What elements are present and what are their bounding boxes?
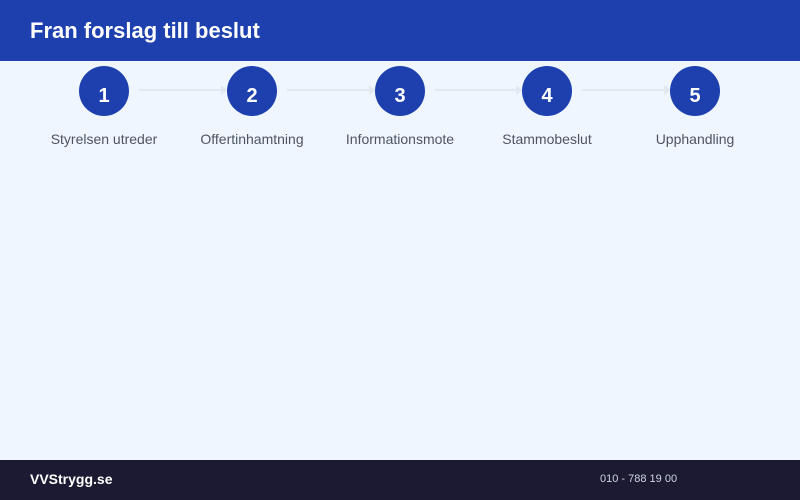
step 5 xyxy=(670,66,720,116)
arrow 1-2 xyxy=(139,85,228,95)
arrow 2-3 xyxy=(287,85,376,95)
label 4: Stammobeslut xyxy=(502,131,592,147)
step 2 xyxy=(227,66,277,116)
label 1: Styrelsen utreder xyxy=(51,131,157,147)
label 2: Offertinhamtning xyxy=(200,131,304,147)
header bar xyxy=(0,0,800,61)
step 4 xyxy=(522,66,572,116)
footer xyxy=(0,460,800,500)
step 1: 1 xyxy=(98,85,110,107)
label 3: Informationsmote xyxy=(346,131,454,147)
step 4: 4 xyxy=(541,85,553,107)
phone: 010 - 788 19 00 xyxy=(600,473,677,485)
arrow 4-5 xyxy=(582,85,671,95)
arrow 3-4 xyxy=(435,85,523,95)
step 3: 3 xyxy=(394,85,406,107)
arrows xyxy=(139,85,670,95)
label 5: Upphandling xyxy=(656,131,734,147)
title: Fran forslag till beslut xyxy=(30,18,260,43)
step 3 xyxy=(375,66,425,116)
step 2: 2 xyxy=(246,85,258,107)
brand: VVStrygg.se xyxy=(30,471,112,487)
step 5: 5 xyxy=(689,85,701,107)
step 1 xyxy=(79,66,129,116)
